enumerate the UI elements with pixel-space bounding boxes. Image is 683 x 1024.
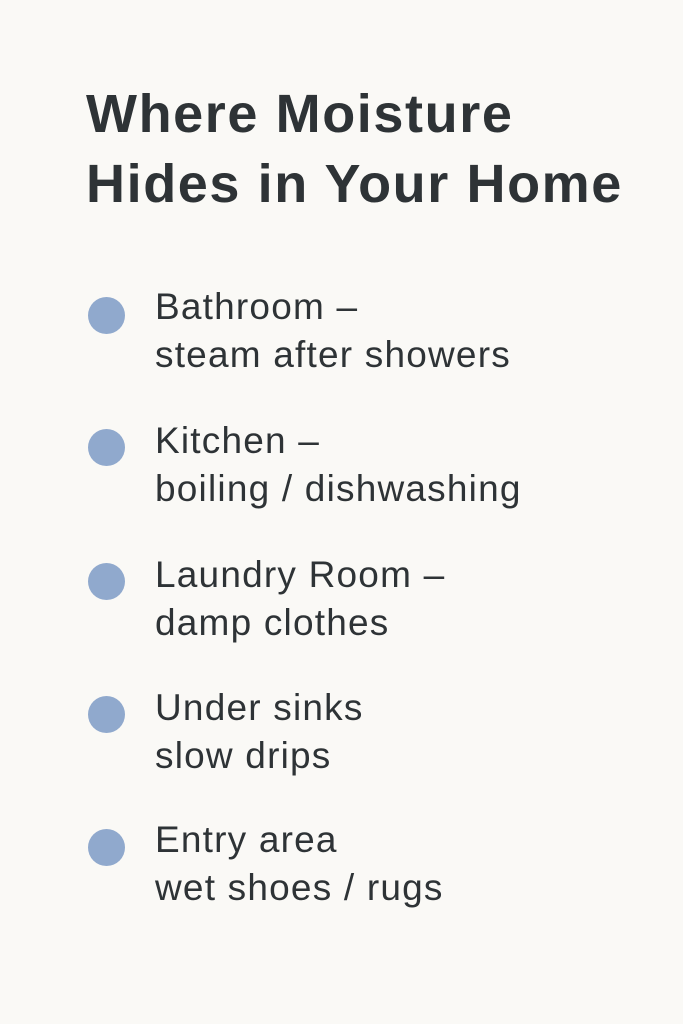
text: entry area: Entry area xyxy=(155,819,338,860)
icon: bullet dot xyxy=(88,429,125,466)
text: laundry room: damp clothes xyxy=(155,602,389,643)
text: kitchen: Kitchen – xyxy=(155,420,320,461)
text: under sinks: slow drips xyxy=(155,735,332,776)
text: bathroom xyxy=(155,286,511,375)
text: laundry room: Laundry Room – xyxy=(155,554,445,595)
text: bathroom: Bathroom – xyxy=(155,286,358,327)
icon: bullet dot xyxy=(88,563,125,600)
title xyxy=(86,84,623,214)
text: kitchen xyxy=(155,420,522,509)
text: laundry room xyxy=(155,554,445,643)
icon: bullet dot xyxy=(88,829,125,866)
icon: bullet dot xyxy=(88,297,125,334)
item: laundry room xyxy=(88,554,445,643)
title: Hides in Your Home xyxy=(86,154,623,214)
item: under sinks xyxy=(88,687,364,776)
text: under sinks: Under sinks xyxy=(155,687,364,728)
item: entry area xyxy=(88,819,444,908)
item: bathroom xyxy=(88,286,511,375)
text: bathroom: steam after showers xyxy=(155,334,511,375)
text: kitchen: boiling / dishwashing xyxy=(155,468,522,509)
text: entry area xyxy=(155,819,444,908)
text: under sinks xyxy=(155,687,364,776)
icon: bullet dot xyxy=(88,696,125,733)
text: entry area: wet shoes / rugs xyxy=(155,867,444,908)
title: Where Moisture xyxy=(86,84,513,144)
item: kitchen xyxy=(88,420,522,509)
